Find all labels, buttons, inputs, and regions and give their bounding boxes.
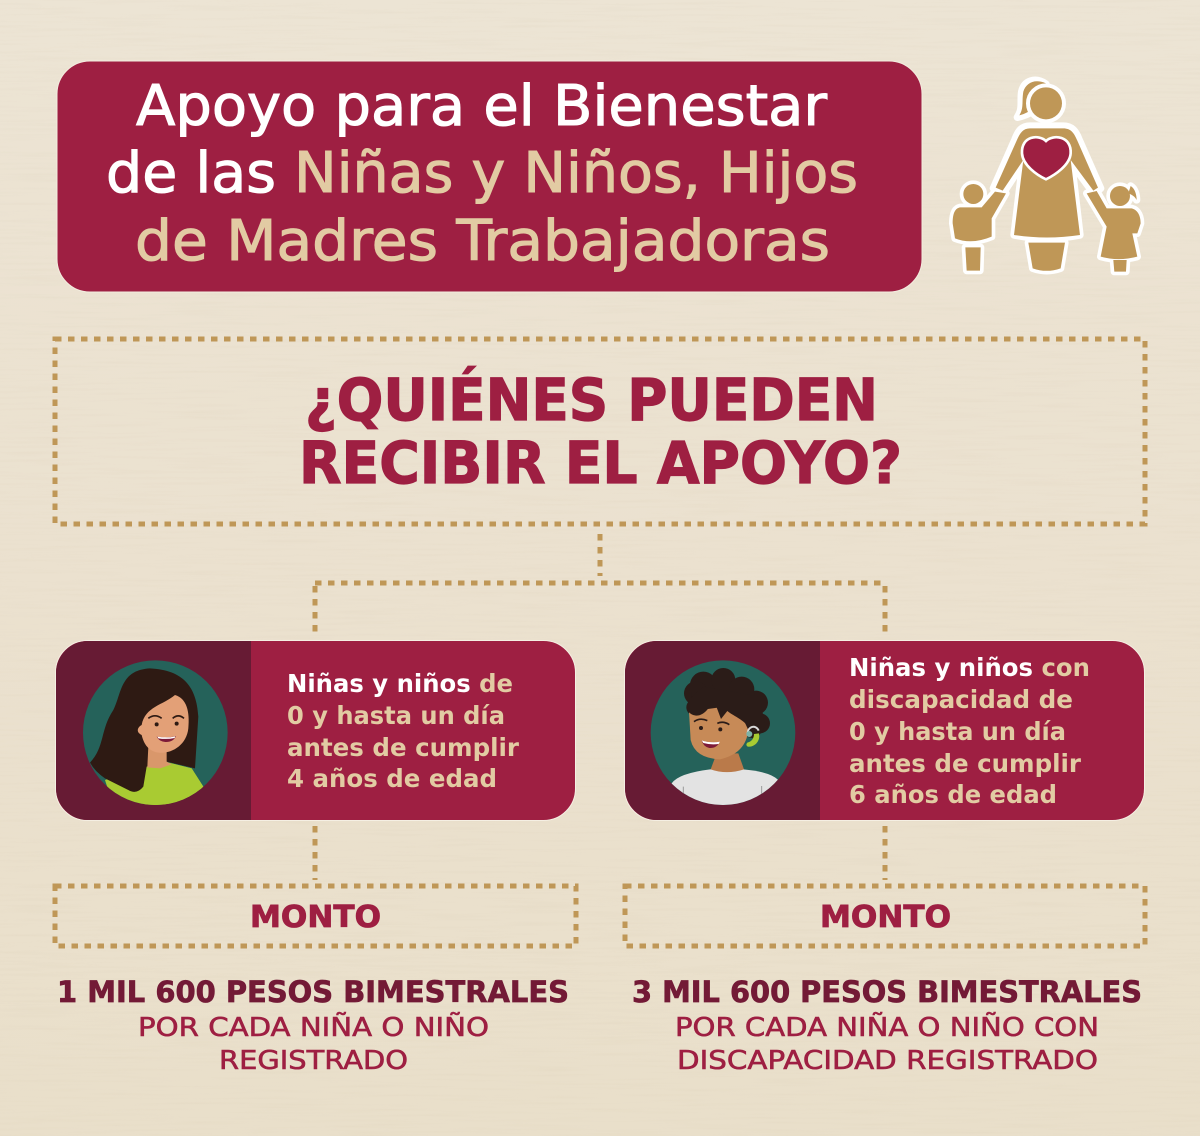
card text: Niñas y niños de [287, 669, 513, 698]
amount text right: DISCAPACIDAD REGISTRADO [677, 1046, 1098, 1076]
card text [849, 653, 1090, 809]
amount text right: POR CADA NIÑA O NIÑO CON [675, 1011, 1099, 1043]
amount text right: 3 MIL 600 PESOS BIMESTRALES [632, 975, 1142, 1009]
heading: RECIBIR EL APOYO? [299, 429, 902, 497]
amount box left: MONTO [250, 900, 381, 935]
amount box right: MONTO [820, 900, 951, 935]
card text: 6 años de edad [849, 780, 1057, 809]
card text: Niñas y niños con [849, 653, 1090, 682]
connector lines [315, 534, 885, 880]
dashed box: question [55, 339, 1145, 524]
card text: antes de cumplir [287, 733, 520, 762]
amount box left [55, 886, 576, 946]
avatar: girl [83, 660, 228, 817]
card text: 0 y hasta un día [287, 701, 505, 730]
card text: 4 años de edad [287, 764, 497, 793]
amount text left: POR CADA NIÑA O NIÑO [138, 1011, 489, 1043]
title text [106, 74, 858, 274]
card text: discapacidad de [849, 685, 1073, 714]
amount text left [57, 975, 569, 1076]
amount text left: 1 MIL 600 PESOS BIMESTRALES [57, 975, 569, 1009]
card text [287, 669, 520, 793]
avatar: child with hearing aid [651, 660, 795, 810]
amount text right [632, 975, 1142, 1076]
title text: de las Niñas y Niños, Hijos [106, 141, 858, 206]
heading [299, 365, 902, 497]
title text: de Madres Trabajadoras [135, 209, 830, 274]
card text: 0 y hasta un día [849, 717, 1066, 746]
amount text left: REGISTRADO [219, 1046, 408, 1076]
icon: mother holding two children's hands [953, 80, 1141, 272]
title text: Apoyo para el Bienestar [136, 74, 828, 139]
heading: ¿QUIÉNES PUEDEN [305, 365, 878, 434]
title panel [57, 61, 922, 292]
card: children up to 4 years [56, 640, 576, 820]
card: children with disability up to 6 years [624, 640, 1144, 820]
card text: antes de cumplir [849, 749, 1082, 778]
amount box right [625, 886, 1145, 946]
